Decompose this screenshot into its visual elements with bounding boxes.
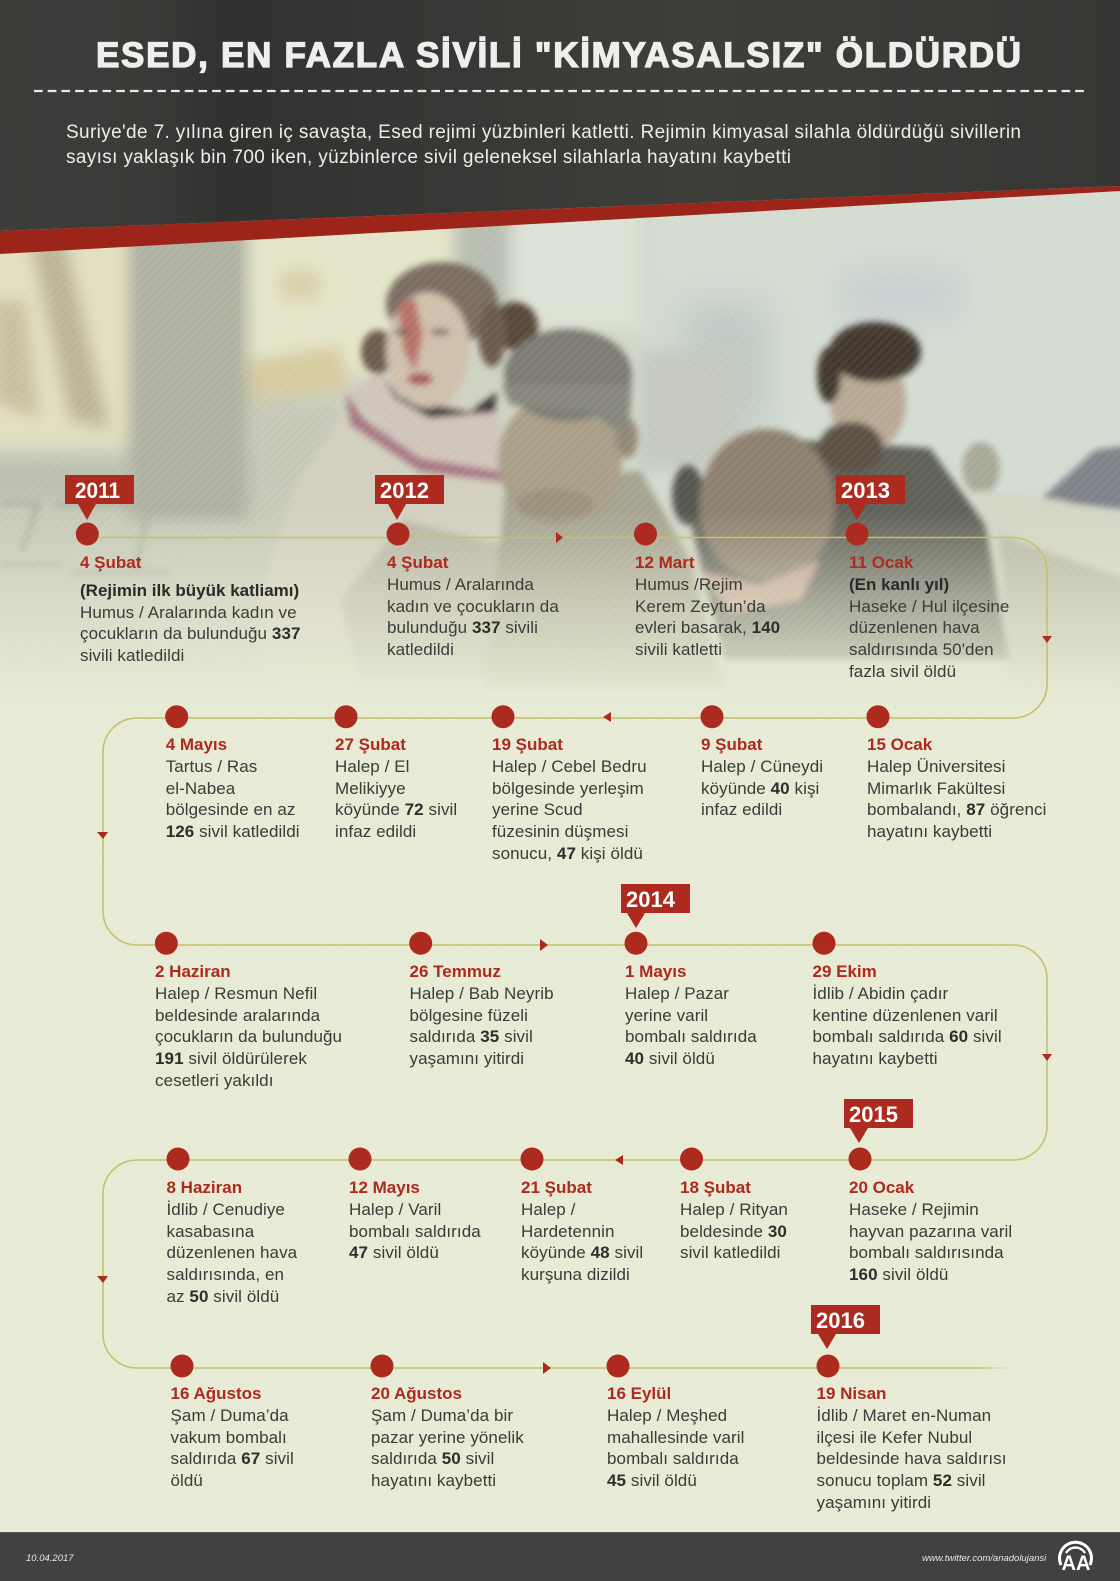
description: Halep / Cebel Bedru: [492, 757, 647, 776]
date: 26 Temmuz: [410, 962, 501, 981]
year tag 2013: 2013: [841, 478, 890, 503]
event: 1 Mayıs: [625, 962, 757, 1068]
description: saldırıda 50 sivil: [371, 1449, 494, 1468]
date: 16 Ağustos: [170, 1384, 262, 1403]
distant figures: [1040, 445, 1120, 510]
header dark band: [0, 0, 1120, 231]
event: 20 Ağustos: [371, 1384, 524, 1490]
date: 9 Şubat: [701, 735, 762, 754]
event: 4 Mayıs: [166, 735, 300, 841]
description: [607, 1405, 745, 1492]
description: [625, 984, 757, 1068]
title: ESED, EN FAZLA SİVİLİ "KİMYASALSIZ" ÖLDÜRDÜ: [96, 36, 1021, 75]
description: [170, 1406, 294, 1490]
description: kentine düzenlenen varil: [812, 1006, 998, 1025]
grey-haired man's face: [498, 394, 622, 526]
description: hayatını kaybetti: [812, 1049, 938, 1068]
event: 12 Mayıs: [349, 1178, 481, 1262]
event: 20 Ocak: [849, 1178, 1012, 1284]
description: [680, 1200, 788, 1262]
description: infaz edildi: [701, 800, 782, 819]
description: Humus / Aralarında: [387, 575, 534, 594]
description: [80, 581, 301, 665]
description: 40 sivil öldü: [625, 1049, 715, 1068]
girl's hair: [386, 262, 498, 346]
date: 15 Ocak: [867, 735, 932, 754]
description: saldırıda 67 sivil: [170, 1449, 294, 1468]
description: Kerem Zeytun’da: [635, 597, 766, 616]
description: öldü: [170, 1471, 203, 1490]
description: kurşuna dizildi: [521, 1265, 630, 1284]
date: 20 Ağustos: [371, 1384, 462, 1403]
description: [849, 575, 1009, 681]
description: bombalı saldırıda: [349, 1222, 481, 1241]
description: çocukların da bulunduğu: [155, 1027, 342, 1046]
description: [849, 1200, 1012, 1284]
description: 191 sivil öldürülerek: [155, 1049, 307, 1068]
description: [492, 757, 647, 863]
description: [816, 1405, 1007, 1514]
year tag 2016: [811, 1305, 880, 1349]
description: infaz edildi: [335, 822, 416, 841]
event: 15 Ocak: [867, 735, 1046, 841]
description: İdlib / Maret en-Numan: [816, 1406, 991, 1425]
grey-haired man's body: [485, 470, 725, 690]
description: Haseke / Hul ilçesine: [849, 597, 1009, 616]
girl's sweater: [258, 415, 510, 690]
description: Halep / Rityan: [680, 1200, 788, 1219]
description: 47 sivil öldü: [349, 1243, 439, 1262]
description: İdlib / Abidin çadır: [812, 984, 948, 1003]
date: 20 Ocak: [849, 1178, 914, 1197]
fade of photo into paper: [0, 500, 1120, 800]
red diagonal strip: [0, 186, 1120, 254]
description: beldesinde 30: [680, 1222, 787, 1241]
description: fazla sivil öldü: [849, 662, 956, 681]
description: hayatını kaybetti: [867, 822, 992, 841]
description: katledildi: [387, 640, 454, 659]
date: 19 Şubat: [492, 735, 563, 754]
description: Humus /Rejim: [635, 575, 743, 594]
date: 4 Şubat: [80, 553, 141, 572]
description: saldırısında, en: [166, 1265, 284, 1284]
description: yaşamını yitirdi: [410, 1049, 524, 1068]
description: [387, 575, 559, 659]
description: [335, 757, 457, 841]
description: hayatını kaybetti: [371, 1471, 496, 1490]
event: 4 Şubat 2011: [80, 553, 301, 665]
description: Halep /: [521, 1200, 575, 1219]
description: [812, 984, 1002, 1068]
description: [635, 575, 780, 659]
description: beldesinde hava saldırısı: [816, 1449, 1007, 1468]
description: Halep / Varil: [349, 1200, 441, 1219]
date: 19 Nisan: [816, 1384, 886, 1403]
description: Humus / Aralarında kadın ve: [80, 603, 297, 622]
description: bölgesinde yerleşim: [492, 779, 644, 798]
grey-haired man's hair: [504, 329, 632, 421]
description: [701, 757, 823, 819]
description: Halep / Pazar: [625, 984, 729, 1003]
description: bombalandı, 87 öğrenci: [867, 800, 1046, 819]
description: az 50 sivil öldü: [166, 1287, 279, 1306]
description: sonucu, 47 kişi öldü: [492, 844, 643, 863]
event: 8 Haziran: [166, 1178, 298, 1306]
direction arrows: [97, 532, 1052, 1374]
year tag 2014: [621, 884, 690, 928]
description: bombalı saldırıda: [625, 1027, 757, 1046]
description: bulunduğu 337 sivili: [387, 618, 538, 637]
description: evleri basarak, 140: [635, 618, 780, 637]
description: bölgesine füzeli: [410, 1006, 528, 1025]
description: [155, 984, 342, 1090]
event: 2 Haziran: [155, 962, 342, 1090]
description: (En kanlı yıl): [849, 575, 949, 594]
description: [867, 757, 1046, 841]
description: Tartus / Ras: [166, 757, 257, 776]
timeline dots: [76, 522, 890, 1378]
description: sivil katledildi: [680, 1243, 780, 1262]
event: 19 Şubat: [492, 735, 647, 863]
rubble sheet at right: [975, 490, 1120, 580]
description: [349, 1200, 481, 1262]
description: saldırısında 50'den: [849, 640, 994, 659]
date: 11 Ocak: [849, 553, 913, 572]
date: 2 Haziran: [155, 962, 231, 981]
description: yerine varil: [625, 1006, 708, 1025]
right man's face: [830, 352, 906, 452]
description: 160 sivil öldü: [849, 1265, 948, 1284]
event: 29 Ekim: [812, 962, 1002, 1068]
description: köyünde 40 kişi: [701, 779, 819, 798]
description: Halep / El: [335, 757, 410, 776]
icon: agency logo: [1056, 1540, 1096, 1572]
year tag 2015: [844, 1099, 913, 1143]
description: sivili katletti: [635, 640, 722, 659]
footer date: 10.04.2017: [26, 1553, 74, 1564]
description: kasabasına: [166, 1222, 254, 1241]
year tag 2011: [65, 475, 134, 520]
description: [410, 984, 554, 1068]
description: Haseke / Rejimin: [849, 1200, 979, 1219]
description: cesetleri yakıldı: [155, 1071, 274, 1090]
date: 18 Şubat: [680, 1178, 751, 1197]
description: Halep / Bab Neyrib: [410, 984, 554, 1003]
year tag 2012: [375, 475, 444, 520]
description: [521, 1200, 643, 1284]
description: yaşamını yitirdi: [816, 1493, 931, 1512]
event: 16 Eylül: [607, 1383, 745, 1492]
date: 12 Mart: [635, 553, 695, 572]
year tag 2012: 2012: [380, 478, 429, 503]
distant rubble frames: [0, 503, 170, 572]
date: 1 Mayıs: [625, 962, 686, 981]
description: Şam / Duma’da: [170, 1406, 289, 1425]
right man's body: [690, 440, 1010, 660]
event: 16 Ağustos: [170, 1384, 294, 1490]
description: [166, 757, 300, 841]
description: bombalı saldırıda 60 sivil: [812, 1027, 1002, 1046]
description: 126 sivil katledildi: [166, 822, 300, 841]
event: 11 Ocak: [849, 553, 1009, 681]
child in arms: [672, 465, 704, 525]
description: Hardetennin: [521, 1222, 614, 1241]
date: 29 Ekim: [812, 962, 877, 981]
description: köyünde 72 sivil: [335, 800, 457, 819]
description: yerine Scud: [492, 800, 583, 819]
timeline path: [87, 538, 1047, 1368]
date: 8 Haziran: [166, 1178, 242, 1197]
description: Halep / Resmun Nefil: [155, 984, 317, 1003]
description: bombalı saldırıda: [607, 1449, 739, 1468]
footer band: [0, 1532, 1120, 1581]
description: düzenlenen hava: [849, 618, 980, 637]
header text: [34, 36, 1084, 168]
description: bombalı saldırısında: [849, 1243, 1004, 1262]
event: 18 Şubat: [680, 1178, 788, 1262]
description: Halep / Cüneydi: [701, 757, 823, 776]
year tag 2013: [836, 475, 905, 520]
event: 12 Mart: [635, 553, 780, 659]
event: 21 Şubat: [521, 1178, 643, 1284]
description: sonucu toplam 52 sivil: [816, 1471, 986, 1490]
description: bölgesinde en az: [166, 800, 296, 819]
description: Halep Üniversitesi: [867, 757, 1005, 776]
description: [166, 1200, 298, 1306]
date: 21 Şubat: [521, 1178, 592, 1197]
description: 45 sivil öldü: [607, 1471, 697, 1490]
description: saldırıda 35 sivil: [410, 1027, 533, 1046]
event: 9 Şubat: [701, 735, 823, 819]
event: 26 Temmuz: [410, 962, 554, 1068]
year tag 2014: 2014: [626, 887, 676, 912]
intro text: Suriye'de 7. yılına giren iç savaşta, Esed rejimi yüzbinleri katletti. Rejimin kimyasal silahla öldürdüğü sivillerin: [66, 122, 1021, 143]
date: 12 Mayıs: [349, 1178, 420, 1197]
date: 16 Eylül: [607, 1384, 671, 1403]
event: 27 Şubat: [335, 735, 457, 841]
right man's hair: [829, 322, 921, 382]
girl's scarf: [345, 372, 503, 478]
description: [371, 1405, 524, 1492]
description: hayvan pazarına varil: [849, 1222, 1012, 1241]
description: el-Nabea: [166, 779, 235, 798]
intro text: sayısı yaklaşık bin 700 iken, yüzbinlerce sivil geleneksel silahlarla hayatını kaybetti: [66, 147, 791, 168]
description: vakum bombalı: [170, 1428, 287, 1447]
description: füzesinin düşmesi: [492, 822, 628, 841]
date: 4 Mayıs: [166, 735, 227, 754]
description: beldesinde aralarında: [155, 1006, 320, 1025]
footer social link: www.twitter.com/anadolujansi: [922, 1553, 1046, 1564]
description: ilçesi ile Kefer Nubul: [816, 1428, 972, 1447]
girl's face: [386, 292, 470, 408]
description: düzenlenen hava: [166, 1243, 297, 1262]
description: Melikiyye: [335, 779, 406, 798]
date: 27 Şubat: [335, 735, 406, 754]
description: pazar yerine yönelik: [371, 1428, 524, 1447]
intro text: [66, 122, 1021, 168]
description: kadın ve çocukların da: [387, 597, 559, 616]
year tag 2011: 2011: [75, 478, 120, 503]
event: 19 Nisan: [816, 1383, 1007, 1514]
date: 4 Şubat: [387, 553, 448, 572]
year tag 2016: 2016: [816, 1308, 865, 1333]
event: 4 Şubat 2012: [387, 553, 559, 659]
description: (Rejimin ilk büyük katliamı): [80, 581, 299, 600]
description: sivili katledildi: [80, 646, 184, 665]
year tag 2015: 2015: [849, 1102, 898, 1127]
description: İdlib / Cenudiye: [166, 1200, 285, 1219]
description: Şam / Duma’da bir: [371, 1406, 513, 1425]
description: Halep / Meşhed: [607, 1406, 727, 1425]
description: mahallesinde varil: [607, 1428, 745, 1447]
description: köyünde 48 sivil: [521, 1243, 643, 1262]
description: Mimarlık Fakültesi: [867, 779, 1005, 798]
description: çocukların da bulunduğu 337: [80, 624, 301, 643]
